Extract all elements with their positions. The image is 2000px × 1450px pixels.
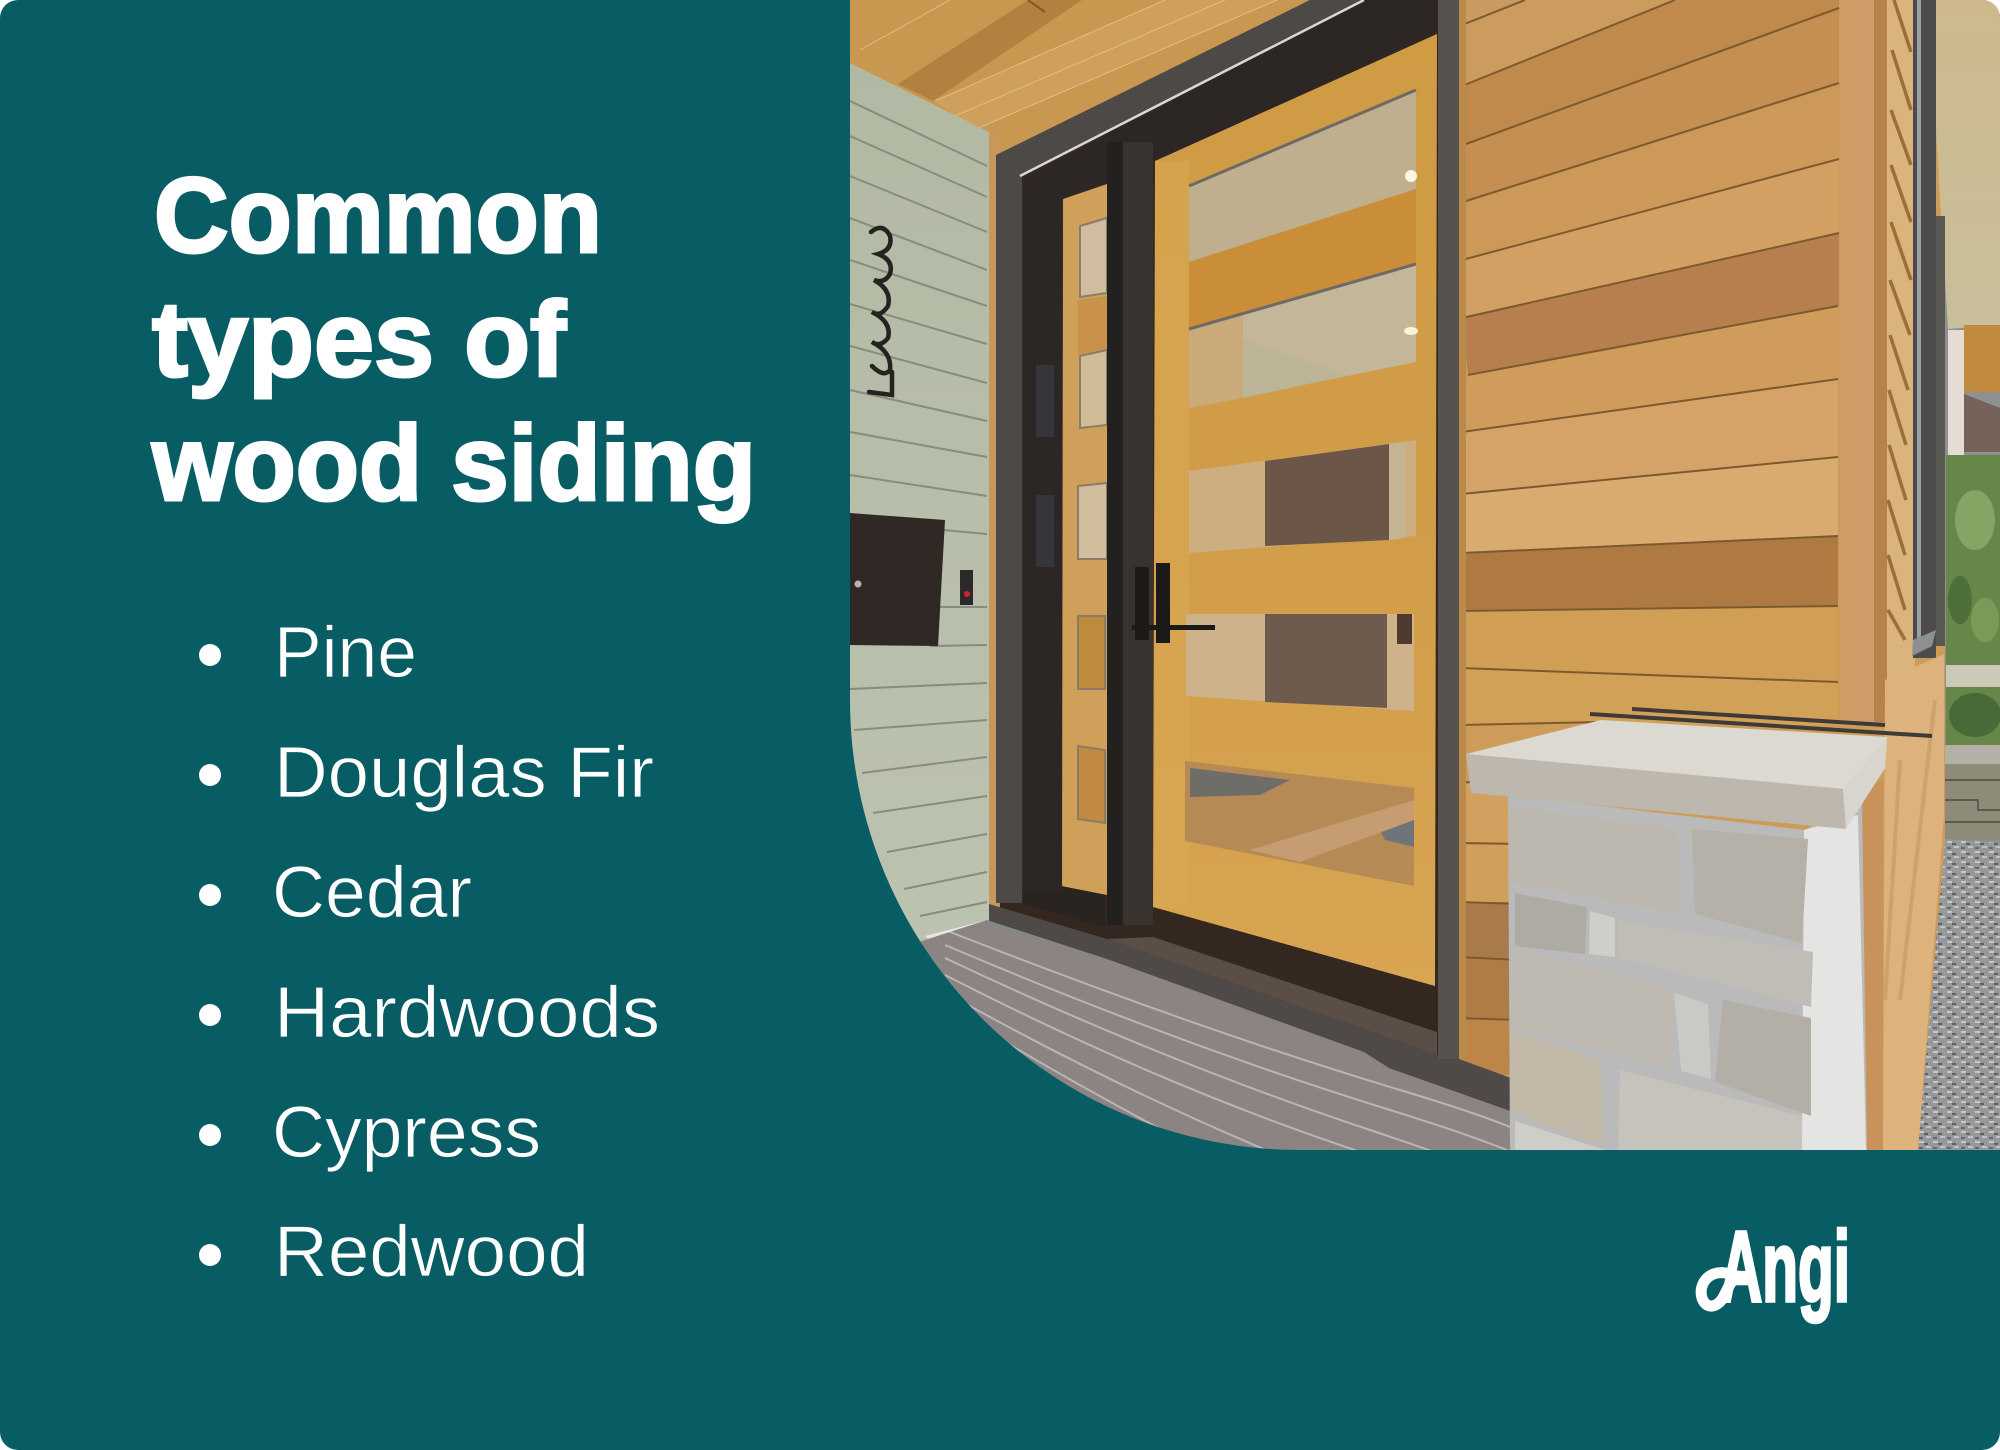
list item: Hardwoods: Hardwoods [274, 973, 660, 1053]
right background: soffit, buildings, shrub, wall, gravel [1918, 0, 2000, 1150]
metal flashing [1590, 709, 1932, 736]
wood trim strip [989, 132, 1001, 907]
Angi logo: Angi [1720, 1211, 1850, 1323]
title: wood siding [151, 403, 756, 523]
list item: Douglas Fir: Douglas Fir [274, 733, 654, 813]
dark downspout posts [1912, 0, 1945, 658]
corner trim [1841, 0, 1887, 722]
stone pillar [1508, 795, 1867, 1150]
list item: Redwood: Redwood [274, 1212, 589, 1292]
door frame base fill [996, 0, 1459, 1070]
stone cap [1466, 720, 1887, 829]
door sidelight panel [1061, 184, 1107, 895]
window pane 4 [1186, 614, 1414, 711]
door frame sill [989, 886, 1530, 1125]
doorbell [960, 570, 973, 605]
striped door mat [920, 920, 1510, 1150]
Angi logo [1701, 1211, 1850, 1323]
list item: Cypress: Cypress [272, 1093, 541, 1173]
title: types of [152, 279, 566, 399]
mailbox [850, 513, 945, 646]
wood type list [199, 613, 660, 1292]
rail 1 [1189, 189, 1416, 329]
window pane 1 [1189, 90, 1417, 262]
list item: Pine: Pine [274, 613, 417, 693]
lower side wall wood panel [1860, 654, 1944, 1150]
photo: wood-sided entryway with door [850, 0, 2000, 1210]
main wood door [1132, 34, 1437, 986]
title: Common [154, 155, 602, 275]
siding boards: front wall [1457, 0, 1945, 1150]
window pane 5 [1185, 761, 1414, 886]
shingled side wall [1887, 0, 1915, 680]
door handle [1132, 563, 1215, 643]
green lap siding wall [850, 63, 989, 1000]
list item: Pine [199, 613, 417, 693]
list item: Cedar: Cedar [272, 853, 472, 933]
ceiling planks [850, 0, 1310, 152]
door frame [996, 0, 1459, 1059]
window pane 3 [1189, 440, 1416, 553]
title [151, 155, 756, 523]
house number [869, 228, 892, 395]
window pane 2 [1189, 264, 1418, 408]
